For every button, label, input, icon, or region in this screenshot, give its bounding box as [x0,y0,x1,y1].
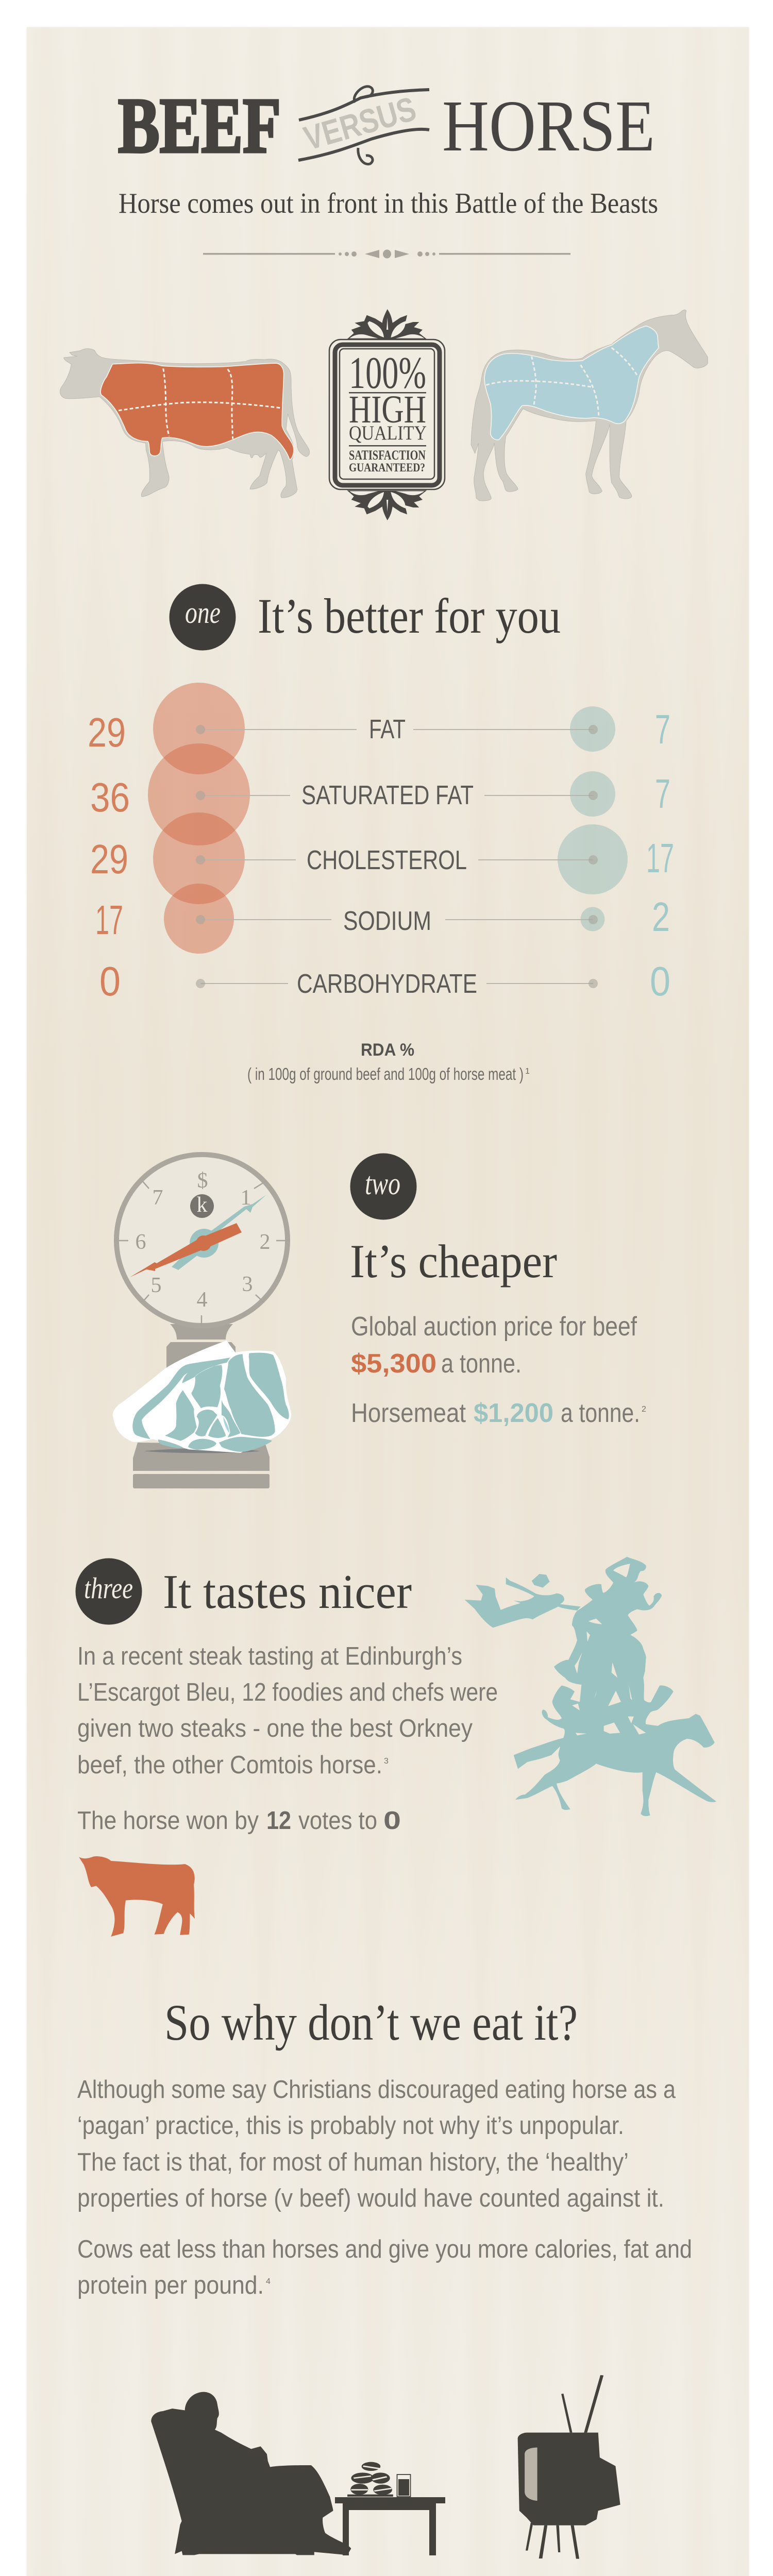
vote result: votes to [298,1807,377,1835]
dial hands [130,1195,266,1277]
icon: cow with cuts of meat [60,349,309,498]
chart caption: RDA %: 1 [525,1067,530,1076]
illustration: people stacked on a galloping horse [465,1557,716,1816]
horse values [646,706,674,1004]
beef values: 29 [90,836,128,882]
badge ornament top [347,309,427,339]
number badge: two: two [365,1166,400,1201]
title: Beef versus Horse [118,82,655,170]
paragraph: history: properties of horse (v beef) would have counted against it. [77,2184,664,2212]
silhouette: gaps between figures [572,1564,646,1735]
badge text [349,348,427,474]
section three: it tastes nicer [75,1558,498,1835]
beef values: 0 [99,958,121,1004]
horse values: 2 [652,894,670,940]
connector lines [200,730,593,984]
section one: it's better for you [169,584,561,650]
vote result [77,1807,401,1835]
badge ornament bottom [347,490,427,520]
paragraph: cows eat less: protein per pound. [77,2272,264,2299]
price text: horsemeat: 2 [642,1405,646,1414]
horse values: 7 [655,706,670,752]
chart caption: RDA % [247,1040,530,1083]
nutrient labels: CARBOHYDRATE [297,969,477,999]
illustration: man in armchair [151,2392,351,2555]
icon: horse with cuts of meat [471,310,708,501]
paragraph: history: The fact is that, for most of human history, the ‘healthy’ [77,2148,629,2176]
burgers [347,2462,393,2497]
badge text: QUALITY [349,422,427,444]
dial face: 2 [260,1230,270,1254]
heading: it tastes nicer: It tastes nicer [163,1565,412,1619]
badge text: HIGH [349,388,426,431]
beef bubbles [148,683,250,954]
badge: 100% high quality [329,309,445,520]
badge text: 100% [349,348,426,398]
paragraph: cows eat less [77,2235,692,2299]
number badge: one [169,584,236,650]
price text: horsemeat: Horsemeat [351,1398,466,1428]
versus flourish: VERSUS [299,89,420,157]
dial face [116,1155,289,1326]
horse values: 7 [655,771,670,817]
illustration: table with burgers and drink [335,2462,445,2555]
dial face: k [197,1193,207,1217]
paragraph: history [77,2076,676,2212]
price text: beef: Global auction price for beef [351,1312,637,1342]
dial face: 3 [242,1273,253,1296]
dial face: 6 [135,1230,146,1254]
paragraph: history: Although some say Christians discouraged eating horse as a [77,2076,676,2104]
bubble chart: RDA comparison [88,683,674,1004]
connector dots [196,725,598,988]
badge text: SATISFACTION [349,448,426,463]
dial face: $ [197,1169,208,1193]
nutrient labels: SODIUM [343,906,431,936]
number badge: three: three [84,1571,133,1605]
icon: price scale with steak [113,1155,291,1488]
table [335,2497,445,2555]
number badge: two [350,1153,416,1220]
heading: it's better for you: It’s better for you [258,588,561,643]
silhouette: stack and horse [514,1557,716,1816]
price text: beef: $5,300 [351,1349,436,1379]
chart caption: RDA %: ( in 100g of ground beef and 100g of horse meat ) [247,1064,524,1083]
paragraph: cows eat less: Cows eat less than horses and give you more calories, fat and [77,2235,692,2263]
section two: it's cheaper [350,1153,646,1428]
nutrient labels [297,715,477,999]
dial face: 4 [197,1288,207,1312]
paragraph: steak tasting: In a recent steak tasting at Edinburgh’s [77,1642,462,1670]
dial face: 5 [150,1274,162,1297]
title word: HORSE: HORSE [442,85,655,166]
chart caption: RDA %: RDA % [361,1040,414,1060]
beef values: 29 [88,709,126,755]
paragraph: steak tasting: beef, the other Comtois horse. [77,1751,382,1779]
price text: horsemeat [351,1398,646,1428]
ornamental divider [203,249,570,259]
beef values: 36 [90,774,130,820]
steak [113,1341,291,1453]
section: so why don't we eat it [77,1994,692,2299]
dial face: 7 [153,1186,163,1210]
icon: small orange cow [79,1856,195,1937]
paragraph: cows eat less: 4 [266,2277,271,2286]
horse values: 0 [650,958,670,1004]
number badge: one: one [185,596,221,630]
title word: BEEF: BEEF [118,82,281,170]
silhouette: flying figure [465,1574,581,1628]
vote result: The horse won by [77,1807,259,1835]
nutrient labels: SATURATED FAT [301,781,474,810]
paragraph: history: ‘pagan’ practice, this is probably not why it’s unpopular. [77,2112,624,2140]
vote result: 12 [266,1807,291,1835]
vote result: 0 [383,1807,401,1835]
heading: so why don't we eat it: So why don’t we eat it? [164,1994,578,2051]
price text: horsemeat: $1,200 [474,1398,553,1428]
paragraph: steak tasting: L’Escargot Bleu, 12 foodies and chefs were [77,1679,498,1706]
nutrient labels: CHOLESTEROL [307,845,467,875]
horse values: 17 [646,835,674,881]
badge text: GUARANTEED? [349,461,425,474]
paragraph: steak tasting: 3 [384,1757,389,1766]
badge frame [329,340,445,489]
beef values: 17 [95,897,123,943]
illustration: television [518,2375,620,2559]
nutrient labels: FAT [369,715,406,744]
price text: beef: a tonne. [441,1349,522,1379]
beef values [88,709,130,1004]
subtitle: Horse comes out in front in this Battle of the Beasts [119,188,658,219]
heading: it's cheaper: It’s cheaper [350,1235,557,1287]
horse bubbles [558,706,628,931]
scale neck and base [133,1324,270,1488]
number badge: three [75,1558,142,1625]
price text: beef [351,1312,637,1379]
glass [397,2475,410,2497]
price text: horsemeat: a tonne. [561,1398,640,1428]
dial face: 1 [240,1186,251,1210]
paragraph: steak tasting [77,1642,498,1779]
paragraph: steak tasting: given two steaks - one the best Orkney [77,1715,473,1742]
